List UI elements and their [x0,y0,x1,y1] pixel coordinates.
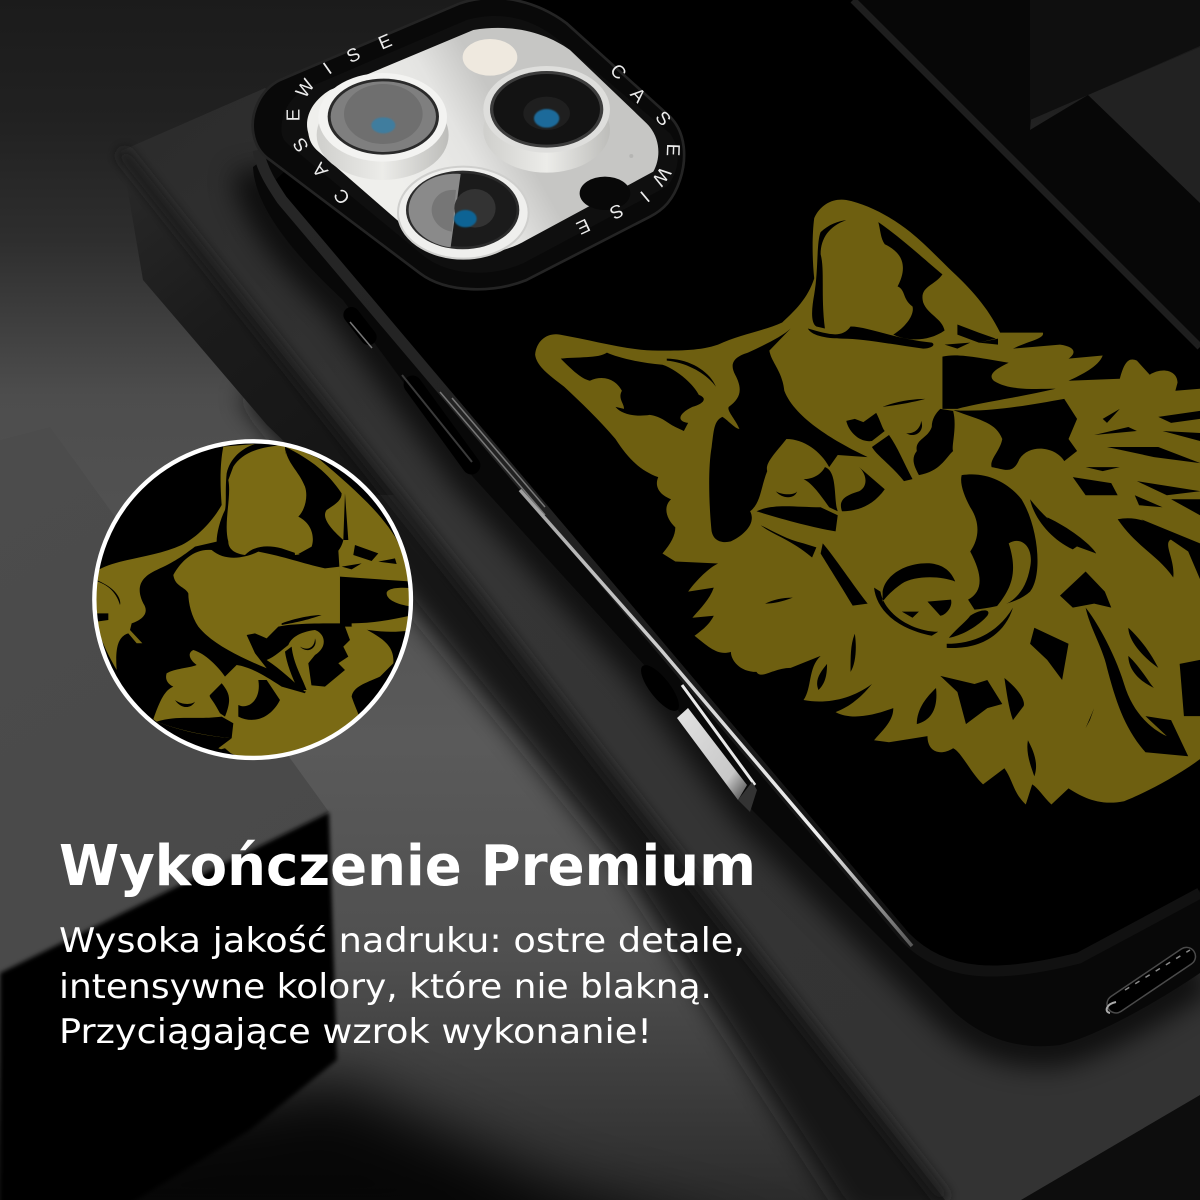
brand text ring: S [343,43,364,67]
side button silver [635,660,757,812]
brand text ring: E [283,109,304,121]
inset forehead [173,550,340,668]
brand text ring: W [291,75,319,101]
brand text ring: A [626,83,651,107]
inset right tufts [352,588,413,632]
side button slot small [340,304,380,348]
brand text ring: S [607,200,627,224]
phone edge upper reflections [440,392,545,515]
camera window [307,28,658,254]
magnified detail circle [92,441,413,762]
brand text ring: A [307,158,332,182]
inset white ring [94,441,411,758]
lens 2 [483,66,610,173]
body text: Przyciągające wzrok wykonanie! [59,1012,652,1052]
camera bump outer frame [253,0,684,289]
phone edge highlight [520,490,912,946]
body text: intensywne kolory, które nie blakną. [59,967,712,1007]
brand text ring: S [651,107,675,130]
lens 1 [317,73,449,180]
inset left fur strip [92,444,255,670]
brand text ring: C [606,60,631,84]
background: upper-right block [853,0,1200,347]
side button slot long [400,372,484,478]
brand text ring: E [573,215,593,239]
body text [59,921,745,1052]
camera bump [253,0,684,289]
brand text ring: W [648,164,675,190]
inset ear core [226,446,295,555]
brand text ring [283,29,684,239]
camera bump brand band [281,16,678,273]
phone back surface [270,0,1200,968]
lens 3 [398,167,529,259]
flash [463,39,517,76]
brand text ring: C [329,185,354,209]
charging port [1104,944,1199,1016]
body text: Wysoka jakość nadruku: ostre detale, [59,921,745,961]
phone top-right edge [853,0,1200,347]
brand text ring: E [375,29,395,54]
phone edge lip [258,150,1200,971]
inset lower mass with eye [153,627,393,762]
inset brow line [282,615,322,625]
brand text ring: E [663,143,684,157]
inset ear right [285,443,413,582]
brand text ring: I [319,58,335,78]
brand text ring: S [288,134,313,156]
background: lower-left pedestal block [0,427,337,1200]
microphone hole [580,177,630,210]
sensor dot [629,154,633,158]
phone case body [253,0,1200,1046]
heading: Wykończenie Premium [59,834,756,899]
wolf print on phone [535,200,1200,804]
phone shadow [253,170,1200,1046]
inset small eye [267,630,324,692]
brand text ring: I [636,187,654,206]
